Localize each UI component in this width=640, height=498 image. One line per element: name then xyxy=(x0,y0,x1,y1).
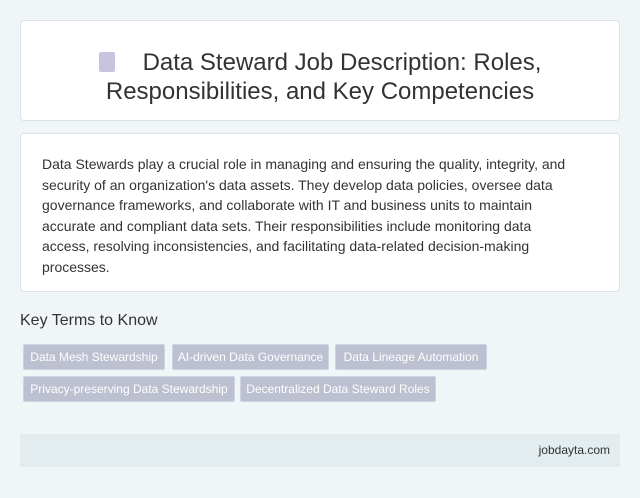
tag xyxy=(240,376,436,402)
tag: Data Mesh Stewardship xyxy=(30,350,158,364)
title card xyxy=(20,20,620,121)
title: Responsibilities, and Key Competencies xyxy=(106,78,534,105)
tag: Privacy-preserving Data Stewardship xyxy=(30,382,228,396)
tag: Decentralized Data Steward Roles xyxy=(246,382,430,396)
key terms heading: Key Terms to Know xyxy=(20,312,158,329)
footer xyxy=(20,434,620,467)
tag: Data Lineage Automation xyxy=(344,350,478,364)
tag xyxy=(172,344,329,370)
tag: AI-driven Data Governance xyxy=(178,350,323,364)
title: Data Steward Job Description: Roles, xyxy=(143,49,541,76)
description card xyxy=(20,133,620,292)
title xyxy=(99,49,541,105)
tag xyxy=(335,344,487,370)
icon: document xyxy=(99,52,115,72)
description text: Data Stewards play a crucial role in managing and ensuring the quality, integrity, and security of an organization's data assets. They develop data policies, oversee data governance frameworks, and collaborate with IT and business units to maintain accurate and compliant data sets. Their responsibilities include monitoring data access, resolving inconsistencies, and facilitating data-related decision-making processes. xyxy=(42,156,565,274)
tag xyxy=(23,344,165,370)
tags xyxy=(23,344,487,402)
footer: jobdayta.com xyxy=(539,443,610,457)
tag xyxy=(23,376,235,402)
